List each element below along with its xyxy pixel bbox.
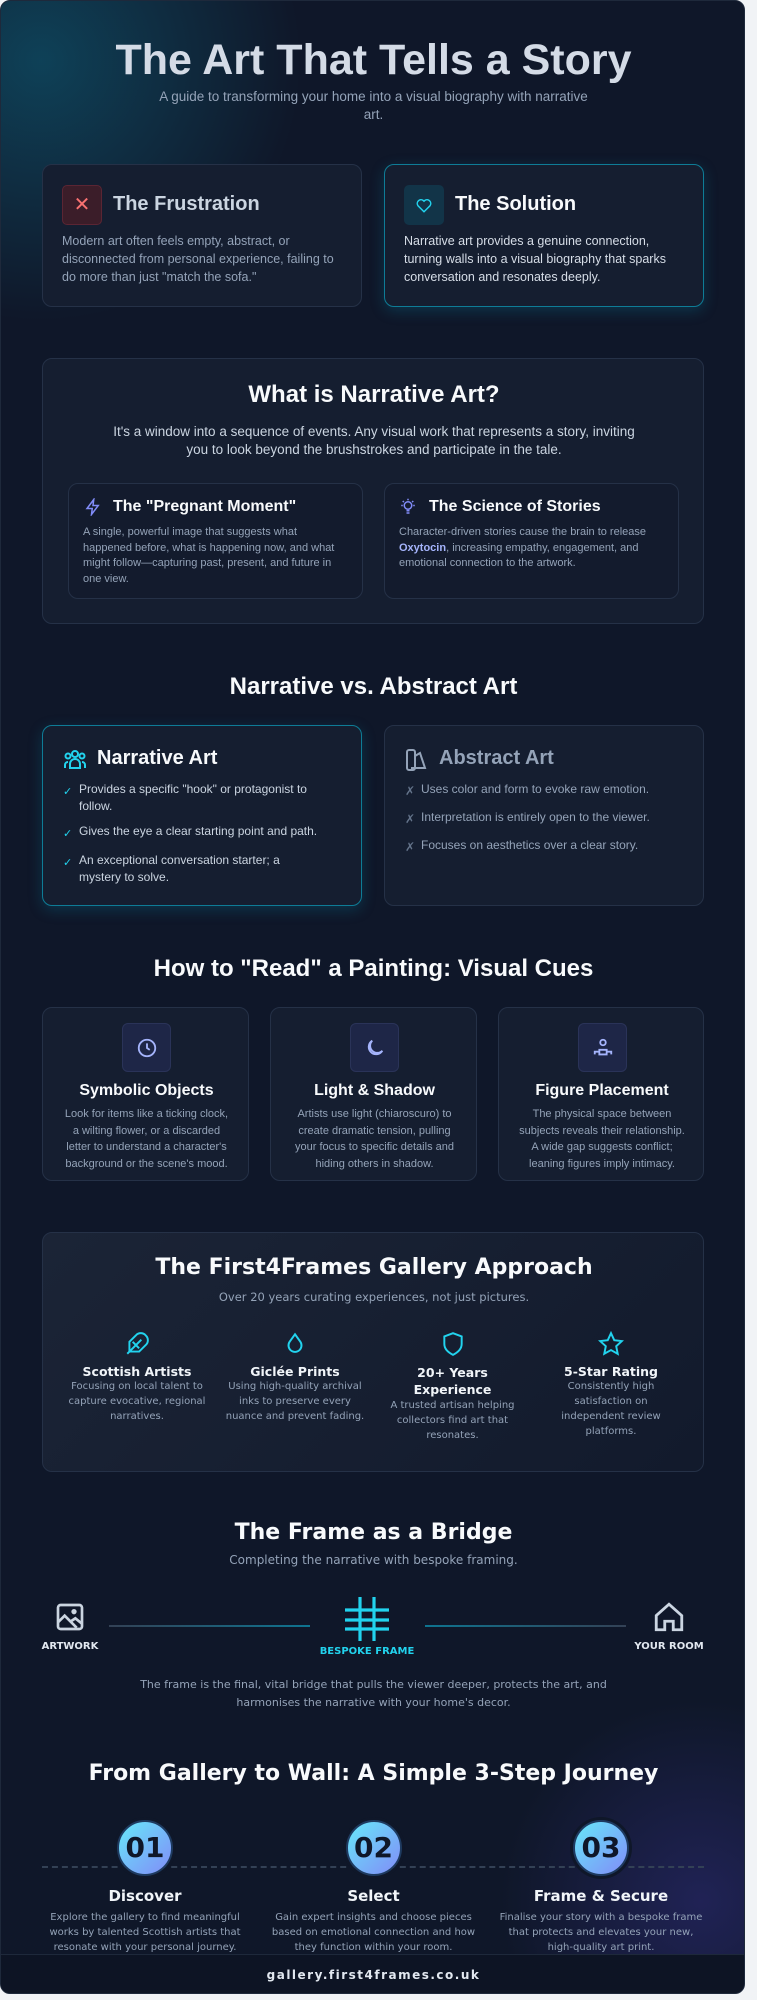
title: The Art That Tells a Story	[115, 36, 632, 84]
panel: abstract art	[384, 725, 704, 906]
subcard: science	[384, 483, 679, 599]
subtitle: Over 20 years curating experiences, not just pictures.	[219, 1290, 529, 1304]
text: Character-driven stories cause the brain to release	[399, 526, 646, 538]
heading: narrative vs abstract: Narrative vs. Abstract Art	[230, 673, 517, 700]
step 1	[49, 1820, 241, 1953]
title: Symbolic Objects	[79, 1082, 214, 1099]
subheading: The Science of Stories	[429, 498, 601, 515]
text: a wilting flower, or a discarded	[73, 1124, 220, 1136]
text: happened before, what is happening now, and what	[83, 542, 334, 554]
bullets: ✗	[405, 784, 415, 798]
bullets: ✗	[405, 840, 415, 854]
feature: giclee prints: inks to preserve every	[239, 1396, 351, 1407]
badge 02: 02	[354, 1831, 393, 1864]
bullets: Interpretation is entirely open to the viewer.	[421, 810, 650, 824]
text: A wide gap suggests conflict;	[531, 1141, 673, 1153]
feature: rating: platforms.	[586, 1426, 636, 1437]
subcard: pregnant moment	[68, 483, 363, 599]
text: Modern art often feels empty, abstract, or	[62, 234, 290, 248]
bullets: ✓	[63, 786, 72, 798]
text: Oxytocin, increasing empathy, engagement, and	[399, 542, 638, 554]
card: light and shadow	[270, 1007, 477, 1181]
icon: your room	[634, 1602, 704, 1652]
subheading: The "Pregnant Moment"	[113, 498, 296, 515]
icon: artwork: ARTWORK	[42, 1641, 98, 1652]
heading: What is Narrative Art?	[248, 381, 500, 408]
feature: rating	[561, 1331, 661, 1437]
text: disconnected from personal experience, failing to	[62, 252, 334, 266]
text: subjects reveals their relationship.	[519, 1124, 685, 1136]
feature: scottish artists: narratives.	[110, 1411, 164, 1422]
badge 01	[117, 1820, 173, 1876]
text	[399, 526, 646, 569]
bullets: ✗	[405, 812, 415, 826]
feature: giclee prints: Giclée Prints	[250, 1364, 340, 1379]
badge 01: 01	[126, 1831, 164, 1864]
badge 03	[573, 1820, 629, 1876]
feature: rating: 5-Star Rating	[564, 1364, 658, 1379]
heading: Abstract Art	[439, 747, 554, 769]
badge 02	[346, 1820, 402, 1876]
step 2	[272, 1820, 475, 1953]
card: figure placement	[498, 1007, 704, 1181]
panel: narrative art	[42, 725, 362, 906]
step 2: Gain expert insights and choose pieces based on emotional connection and how they function within your room.	[272, 1912, 475, 1953]
icon: figure	[578, 1023, 627, 1072]
feature: rating: satisfaction on	[574, 1396, 648, 1407]
feature: experience: Experience	[414, 1382, 491, 1397]
bullets: Focuses on aesthetics over a clear story.	[421, 838, 638, 852]
icon: moon	[350, 1023, 399, 1072]
text: one view.	[83, 572, 129, 584]
bullets: ✓	[63, 857, 72, 869]
text	[83, 526, 334, 584]
card: symbolic objects	[42, 1007, 249, 1181]
subtitle: art.	[364, 107, 383, 122]
feature: rating: independent review	[561, 1411, 661, 1422]
text	[519, 1108, 685, 1170]
connector line right	[425, 1625, 626, 1627]
step 1: Explore the gallery to find meaningful works by talented Scottish artists that resonate with your personal journey.	[49, 1912, 241, 1953]
text: bridge explanation: The frame is the final, vital bridge that pulls the viewer deeper, protects the art, and harmonises the narrative with your home's decor.	[140, 1678, 607, 1709]
feature: scottish artists: Scottish Artists	[83, 1364, 191, 1379]
connector line left	[109, 1625, 310, 1627]
text: letter to understand a character's	[66, 1141, 227, 1153]
text: Narrative art provides a genuine connection,	[404, 234, 649, 248]
text: A single, powerful image that suggests what	[83, 526, 297, 538]
step 3: Frame & Secure	[534, 1887, 668, 1905]
icon: bulb	[401, 498, 415, 514]
text: The physical space between	[533, 1108, 671, 1120]
bullets	[63, 782, 317, 884]
dashed timeline	[42, 1866, 704, 1868]
text: turning walls into a visual biography that sparks	[404, 252, 666, 266]
icon: x: ✕	[74, 194, 90, 216]
bullets: Provides a specific "hook" or protagonist to	[79, 782, 307, 796]
step 2: Select	[347, 1887, 400, 1905]
title: Figure Placement	[535, 1082, 669, 1099]
text: might follow—capturing past, present, and future in	[83, 557, 331, 569]
subtitle	[159, 89, 588, 122]
text: Look for items like a ticking clock,	[65, 1108, 228, 1120]
text: your focus to specific details and	[295, 1141, 454, 1153]
icon: x	[62, 185, 102, 225]
text: Artists use light (chiaroscuro) to	[297, 1108, 452, 1120]
panel: gallery approach	[42, 1232, 704, 1472]
footer	[1, 1954, 746, 1995]
panel: what is narrative art	[42, 358, 704, 624]
icon: people	[64, 750, 86, 769]
intro: you to look beyond the brushstrokes and participate in the tale.	[186, 442, 562, 457]
text: leaning figures imply intimacy.	[529, 1158, 675, 1170]
icon: feather	[126, 1332, 149, 1354]
bullets: Gives the eye a clear starting point and path.	[79, 824, 317, 838]
feature: rating: Consistently high	[568, 1381, 654, 1392]
title: Light & Shadow	[314, 1082, 435, 1099]
icon: artwork	[42, 1604, 99, 1652]
text: do more than just "match the sofa."	[62, 270, 256, 284]
feature: giclee prints: Using high-quality archival	[228, 1381, 362, 1392]
intro	[113, 424, 635, 457]
icon: shield	[443, 1332, 463, 1356]
icon: your room: YOUR ROOM	[634, 1641, 704, 1652]
icon: bespoke frame	[320, 1597, 414, 1657]
bullets: Uses color and form to evoke raw emotion.	[421, 782, 649, 796]
icon: bolt	[86, 498, 100, 516]
heading: The First4Frames Gallery Approach	[155, 1255, 593, 1280]
subtitle: A guide to transforming your home into a visual biography with narrative	[159, 89, 588, 104]
bullets: ✓	[63, 828, 72, 840]
feature: experience: collectors find art that	[397, 1415, 508, 1426]
heading: The Frustration	[113, 193, 260, 215]
feature: experience: resonates.	[426, 1430, 479, 1441]
feature: experience: A trusted artisan helping	[390, 1400, 515, 1411]
icon: star	[598, 1331, 624, 1356]
subtitle: Completing the narrative with bespoke framing.	[229, 1553, 518, 1567]
bullets: An exceptional conversation starter; a	[79, 853, 280, 867]
feature: scottish artists: capture evocative, regional	[69, 1396, 205, 1407]
diagram: bridge	[42, 1597, 704, 1657]
text: conversation and resonates deeply.	[404, 270, 600, 284]
bullets	[405, 782, 650, 854]
icon: drop	[288, 1332, 302, 1353]
bullets: mystery to solve.	[79, 870, 169, 884]
text: background or the scene's mood.	[65, 1158, 228, 1170]
footer: gallery.first4frames.co.uk	[267, 1968, 480, 1982]
badge 03: 03	[582, 1831, 620, 1864]
text: create dramatic tension, pulling	[298, 1124, 451, 1136]
step 3	[500, 1817, 702, 1953]
feature: experience: 20+ Years	[417, 1365, 488, 1380]
icon: heart	[404, 185, 444, 225]
feature: giclee prints: nuance and prevent fading.	[226, 1411, 364, 1422]
heading: visual cues: How to "Read" a Painting: Visual Cues	[154, 955, 593, 982]
heading: frame as bridge: The Frame as a Bridge	[235, 1520, 512, 1545]
heading: Narrative Art	[97, 747, 217, 769]
feature: scottish artists	[69, 1332, 205, 1422]
intro: It's a window into a sequence of events. Any visual work that represents a story, inviting	[113, 424, 635, 439]
text: emotional connection to the artwork.	[399, 557, 576, 569]
step 1: Discover	[108, 1887, 182, 1905]
icon: clock	[122, 1023, 171, 1072]
heading: 3-step journey: From Gallery to Wall: A Simple 3-Step Journey	[89, 1761, 658, 1786]
heading: The Solution	[455, 193, 576, 215]
feature: experience	[390, 1332, 515, 1441]
text	[62, 234, 334, 284]
icon: abstract	[406, 749, 426, 771]
text: hiding others in shadow.	[315, 1158, 434, 1170]
step 3: Finalise your story with a bespoke frame that protects and elevates your new, high-quality art print.	[500, 1912, 702, 1953]
icon: bespoke frame: BESPOKE FRAME	[320, 1646, 414, 1657]
panel: solution	[384, 164, 704, 307]
feature: giclee prints	[226, 1332, 364, 1422]
bullets: follow.	[79, 799, 112, 813]
feature: scottish artists: Focusing on local talent to	[71, 1381, 203, 1392]
text	[295, 1108, 454, 1170]
text	[404, 234, 666, 284]
text	[65, 1108, 228, 1170]
panel: frustration	[42, 164, 362, 307]
